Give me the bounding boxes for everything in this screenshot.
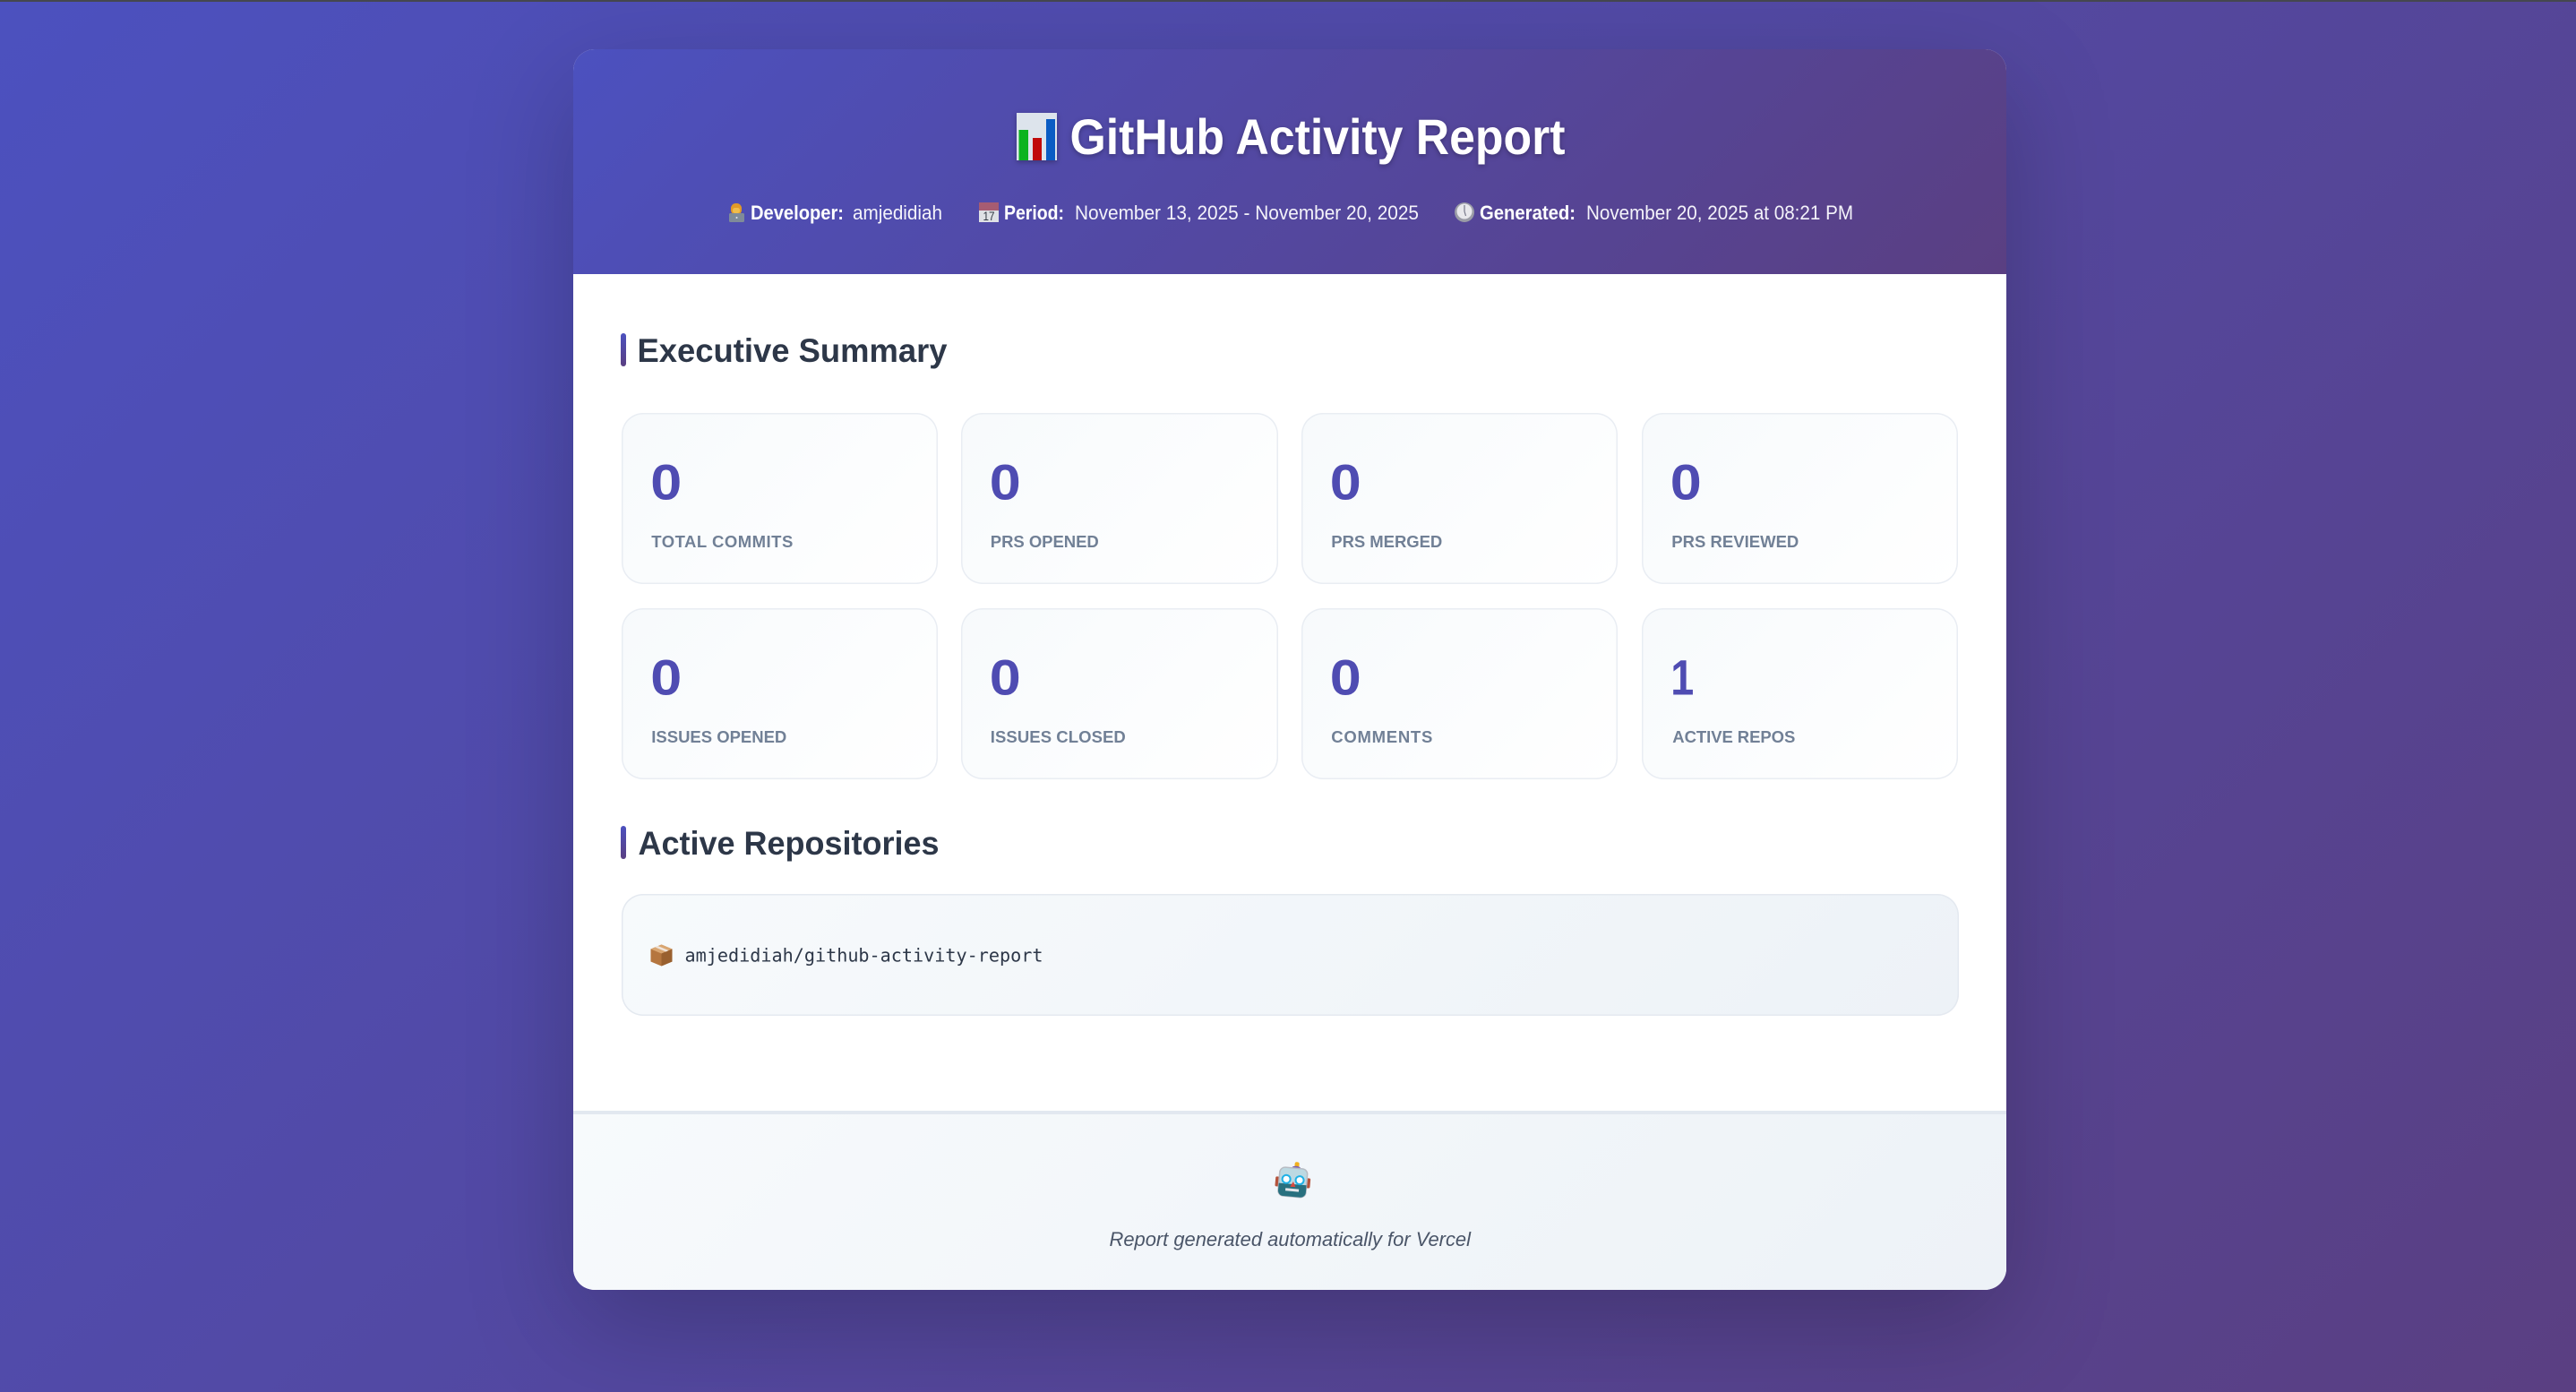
stat: total commits: [622, 413, 938, 584]
stat: issues closed: [961, 608, 1278, 779]
stat: active repos: [1642, 608, 1958, 779]
report card: [573, 49, 2006, 1290]
meta: period: Period:: [1004, 202, 1064, 224]
panel: repository item: [622, 894, 1958, 1016]
meta: generated: [1455, 202, 1853, 224]
meta: developer: Developer:: [751, 202, 844, 224]
stat: comments: [1301, 608, 1618, 779]
repository name: amjedidiah/github-activity-report: [684, 944, 1043, 966]
meta: generated: November 20, 2025 at 08:21 PM: [1586, 202, 1853, 224]
value: 0: [1329, 649, 1361, 706]
panel: executive summary heading: Executive Summary: [638, 332, 948, 369]
label: ISSUES OPENED: [651, 727, 786, 746]
icon: package: [650, 944, 672, 966]
meta: developer: amjedidiah: [853, 202, 942, 224]
value: 0: [650, 649, 682, 706]
label: ISSUES CLOSED: [991, 727, 1126, 746]
label: PRS REVIEWED: [1671, 532, 1799, 551]
value: 0: [1329, 453, 1361, 511]
stat: prs merged: [1301, 413, 1618, 584]
icon: robot: [1275, 1160, 1312, 1199]
meta: developer: [729, 202, 942, 224]
icon: calendar: [979, 202, 999, 223]
panel: header: [573, 49, 2006, 274]
footer text: Report generated automatically for Vercel: [1109, 1228, 1472, 1250]
meta: generated: Generated:: [1480, 202, 1576, 224]
value: 0: [1670, 453, 1701, 511]
value: 0: [650, 453, 682, 511]
meta: period: November 13, 2025 - November 20, 2025: [1075, 202, 1419, 224]
label: ACTIVE REPOS: [1672, 727, 1795, 746]
stat: prs reviewed: [1642, 413, 1958, 584]
icon: calendar: 17: [983, 209, 995, 223]
label: PRS MERGED: [1331, 532, 1442, 551]
value: 0: [990, 649, 1021, 706]
panel: active repositories heading: Active Repositories: [638, 825, 939, 862]
label: COMMENTS: [1331, 727, 1432, 746]
icon: developer: [729, 203, 744, 222]
panel: footer: [573, 1111, 2006, 1290]
value: 1: [1670, 649, 1694, 706]
label: PRS OPENED: [991, 532, 1099, 551]
stat: prs opened: [961, 413, 1278, 584]
stat: issues opened: [622, 608, 938, 779]
label: TOTAL COMMITS: [651, 532, 793, 551]
icon: clock: [1455, 202, 1474, 222]
title: GitHub Activity Report: [1069, 108, 1566, 165]
value: 0: [990, 453, 1021, 511]
